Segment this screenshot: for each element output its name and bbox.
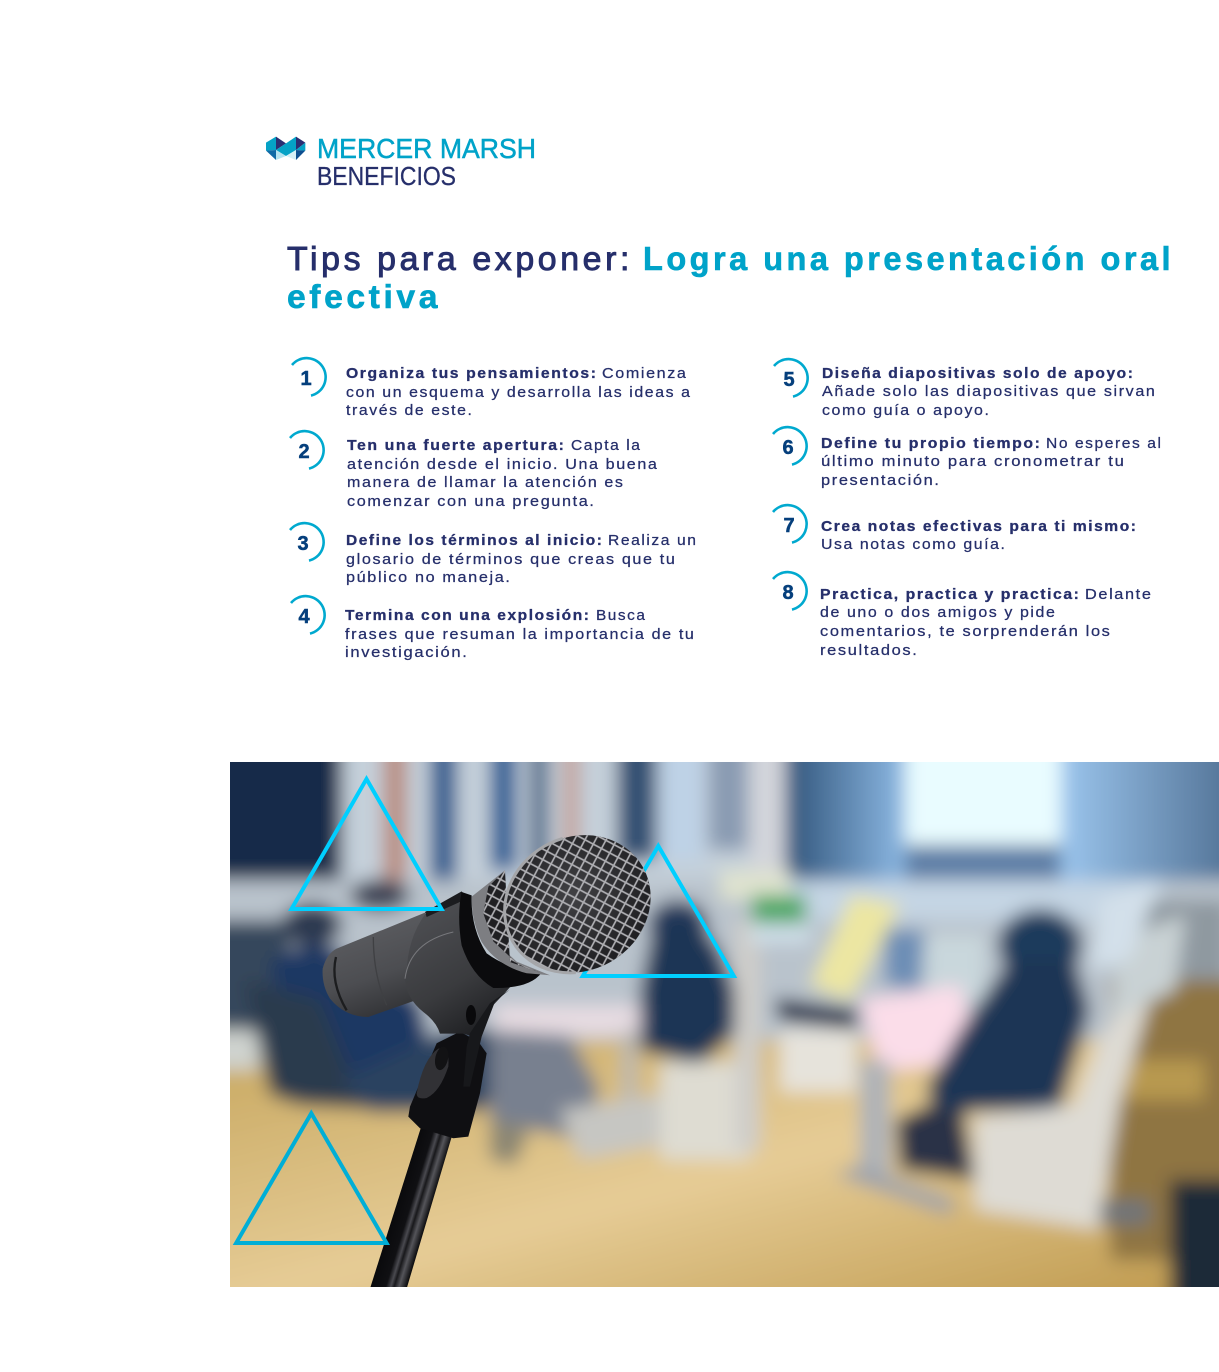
title: Tips para exponer: xyxy=(287,240,633,277)
tip 4: Termina con una explosión: xyxy=(345,607,590,624)
tip 8: 8 xyxy=(782,582,794,604)
triangle behind microphone xyxy=(583,846,734,976)
tip 7 xyxy=(773,505,1138,553)
tip 8: Delante xyxy=(1085,586,1152,603)
tip 6: 6 xyxy=(782,437,794,459)
tip 2: comenzar con una pregunta. xyxy=(347,493,596,510)
tip 2: Ten una fuerte apertura: xyxy=(347,437,566,454)
tip 3: Define los términos al inicio: xyxy=(346,532,604,549)
tip 1: con un esquema y desarrolla las ideas a xyxy=(346,384,692,401)
tip 1: Comienza xyxy=(602,365,688,382)
photo: microphone in front of a blurred audience xyxy=(230,762,1219,1287)
tip 1: 1 xyxy=(300,368,312,390)
microphone pole xyxy=(370,1125,452,1289)
floor xyxy=(230,1030,1188,1287)
microphone back mesh xyxy=(483,870,540,973)
left people xyxy=(282,903,342,947)
icon: logo mark xyxy=(266,137,305,160)
tip 1: través de este. xyxy=(346,402,474,419)
microphone lower clamp xyxy=(408,1032,487,1138)
tip 8: comentarios, te sorprenderán los xyxy=(820,623,1112,640)
tip 3: glosario de términos que creas que tu xyxy=(346,551,676,568)
tip 2: manera de llamar la atención es xyxy=(347,474,624,491)
tip 6: presentación. xyxy=(821,472,940,489)
tip 2 xyxy=(290,431,658,510)
tip 7: Usa notas como guía. xyxy=(821,536,1006,553)
tip 2: 2 xyxy=(298,441,310,463)
tip 6: Define tu propio tiempo: xyxy=(821,435,1042,452)
tip 3: público no maneja. xyxy=(346,569,512,586)
tip 6: No esperes al xyxy=(1046,435,1162,452)
microphone clip xyxy=(408,902,510,1036)
tip 4: frases que resuman la importancia de tu xyxy=(345,626,696,643)
tip 3: Realiza un xyxy=(608,532,698,549)
microphone collar xyxy=(459,892,542,988)
microphone grille xyxy=(506,835,651,973)
logo subtitle: BENEFICIOS xyxy=(317,161,456,191)
tip 5: Diseña diapositivas solo de apoyo: xyxy=(822,365,1134,382)
green and yellow items xyxy=(752,895,806,923)
tip 4: 4 xyxy=(298,606,310,628)
tip 8: de uno o dos amigos y pide xyxy=(820,604,1056,621)
logo: Mercer Marsh Beneficios xyxy=(266,133,536,191)
tip 5: como guía o apoyo. xyxy=(822,402,990,419)
tip 2: Capta la xyxy=(571,437,642,454)
tip 1: Organiza tus pensamientos: xyxy=(346,365,598,382)
microphone clip arm xyxy=(463,989,510,1087)
microphone xyxy=(323,809,676,1289)
tip 7: 7 xyxy=(783,515,795,537)
tip 5 xyxy=(774,359,1156,419)
tip 5: Añade solo las diapositivas que sirvan xyxy=(822,383,1156,400)
tip 6 xyxy=(773,427,1162,489)
photo background: blurred room xyxy=(230,762,1219,1287)
tip 3: 3 xyxy=(297,533,309,555)
logo wordmark: MERCER MARSH xyxy=(317,133,536,164)
tip 2: atención desde el inicio. Una buena xyxy=(347,456,658,473)
seated person xyxy=(998,909,1082,981)
microphone ring xyxy=(503,837,576,974)
tip 6: último minuto para cronometrar tu xyxy=(821,453,1126,470)
desk xyxy=(860,985,980,1072)
title: Logra una presentación oral xyxy=(643,240,1174,277)
title xyxy=(287,240,1174,315)
right-of-mic person xyxy=(648,900,708,950)
tip 4: investigación. xyxy=(345,644,468,661)
tip 4: Busca xyxy=(596,607,646,624)
tip 5: 5 xyxy=(783,369,795,391)
tip 7: Crea notas efectivas para ti mismo: xyxy=(821,518,1138,535)
microphone body xyxy=(323,913,430,1017)
tip 8 xyxy=(773,572,1152,659)
triangle top left xyxy=(292,779,442,909)
triangle bottom left xyxy=(236,1113,386,1243)
tip 4 xyxy=(291,596,696,661)
tip 8: resultados. xyxy=(820,642,918,659)
title: efectiva xyxy=(287,278,441,315)
tip 1 xyxy=(292,358,692,419)
middle table and people xyxy=(495,1005,645,1035)
tip 8: Practica, practica y practica: xyxy=(820,586,1080,603)
white chair xyxy=(975,980,1150,1230)
tip 3 xyxy=(290,523,698,586)
